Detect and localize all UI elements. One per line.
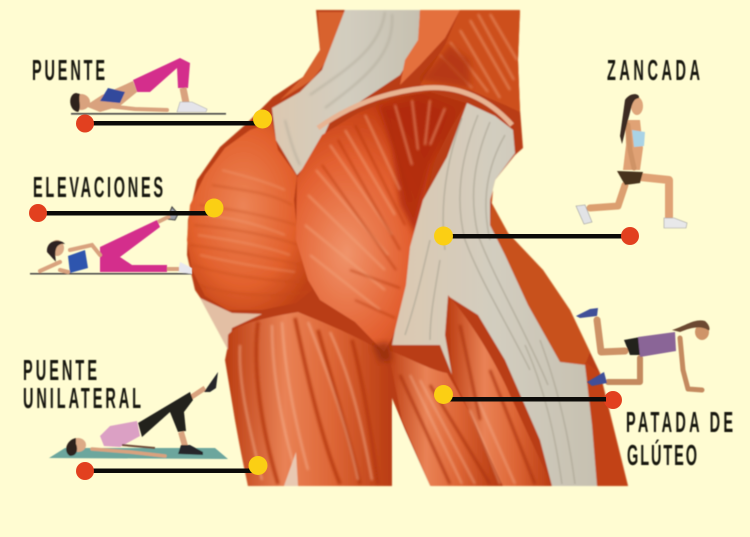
head xyxy=(70,438,86,452)
mat xyxy=(49,448,228,459)
back muscle right xyxy=(420,10,520,112)
torso xyxy=(623,120,643,170)
main gluteus xyxy=(296,92,466,352)
lower back tendon xyxy=(272,10,420,175)
label: puente unilateral: PUENTE xyxy=(23,353,97,386)
top xyxy=(100,88,125,103)
hair xyxy=(47,241,65,262)
lateral thigh muscle xyxy=(490,190,590,365)
exercise: zancada xyxy=(576,53,700,228)
back shoe xyxy=(576,205,592,224)
back muscle fibres xyxy=(440,14,517,98)
thigh gap xyxy=(393,405,431,488)
muscle anatomy illustration xyxy=(187,10,628,488)
top xyxy=(68,250,88,273)
body silhouette xyxy=(187,10,628,486)
foot raised xyxy=(167,207,178,220)
foot lower xyxy=(178,262,192,274)
head xyxy=(631,97,643,115)
head xyxy=(50,240,64,256)
arm xyxy=(628,125,634,168)
pale fascia below far gluteus xyxy=(200,298,262,350)
head xyxy=(695,324,709,340)
label: puente: PUENTE xyxy=(32,53,105,86)
hair xyxy=(70,93,80,112)
IT band tendon xyxy=(392,103,597,486)
center thigh muscle xyxy=(388,350,497,486)
connector: patada de gluteo xyxy=(434,385,622,409)
leggings xyxy=(138,392,193,437)
hair xyxy=(672,320,710,332)
shoe raised xyxy=(204,372,218,392)
lower shoe xyxy=(587,372,607,386)
tendon shadows xyxy=(285,12,392,165)
connector: elevaciones xyxy=(29,198,224,222)
hamstring left xyxy=(228,312,391,486)
lower lateral muscle xyxy=(585,362,628,486)
raised leg xyxy=(190,388,205,398)
head xyxy=(72,94,90,110)
back muscle shadow xyxy=(420,45,470,88)
hamstring divisions xyxy=(256,318,378,484)
label: puente unilateral: UNILATERAL xyxy=(23,381,141,414)
calf xyxy=(181,432,185,446)
raised shoe xyxy=(576,308,598,318)
arm xyxy=(680,338,702,390)
far gluteus fibres xyxy=(190,185,308,295)
back leg xyxy=(590,185,625,208)
hair xyxy=(620,94,639,144)
raised leg xyxy=(100,220,160,270)
hamstring tendon highlight xyxy=(284,452,298,486)
far gluteus xyxy=(187,122,312,310)
arms xyxy=(40,245,100,272)
raised leg xyxy=(597,320,625,352)
thigh fibres xyxy=(400,325,535,484)
torso xyxy=(638,332,676,357)
hair xyxy=(66,438,77,456)
exercise: puente unilateral xyxy=(23,353,228,459)
label: patada de gluteo: GLÚTEO xyxy=(627,438,697,471)
shoe xyxy=(178,445,203,455)
legs xyxy=(133,58,190,92)
connector: puente unilateral xyxy=(76,456,268,480)
right thigh muscle xyxy=(448,295,552,486)
shoe xyxy=(177,102,207,112)
knee leg xyxy=(608,358,640,382)
calf xyxy=(183,88,186,103)
hamstring fibres xyxy=(240,322,372,480)
label: patada de gluteo xyxy=(626,405,733,471)
main gluteus fibres xyxy=(305,100,445,310)
label: patada de gluteo: PATADA DE xyxy=(626,405,733,438)
arm xyxy=(98,105,167,110)
top xyxy=(632,130,645,147)
exercise: puente xyxy=(32,53,226,115)
connector: zancada xyxy=(434,226,639,246)
main gluteus dark core xyxy=(378,100,450,235)
torso xyxy=(85,81,137,112)
shorts xyxy=(624,337,640,355)
label: elevaciones: ELEVACIONES xyxy=(33,170,163,203)
mat line xyxy=(71,113,226,115)
shorts xyxy=(617,171,643,185)
front shoe xyxy=(664,218,687,228)
upper back muscle left xyxy=(280,12,345,100)
front leg xyxy=(640,177,669,217)
label: puente unilateral xyxy=(23,353,141,414)
connector: puente xyxy=(76,110,272,132)
iliac crest band xyxy=(318,88,512,128)
lower leg xyxy=(100,257,167,272)
arm xyxy=(92,449,165,456)
torso xyxy=(100,421,140,447)
oblique muscle xyxy=(400,10,460,85)
mat line xyxy=(30,273,192,274)
exercise: patada de gluteo xyxy=(576,308,733,471)
crease shadow xyxy=(372,342,392,362)
IT band fibres xyxy=(405,115,575,484)
exercise: elevaciones xyxy=(30,170,192,274)
label: zancada: ZANCADA xyxy=(607,53,700,86)
